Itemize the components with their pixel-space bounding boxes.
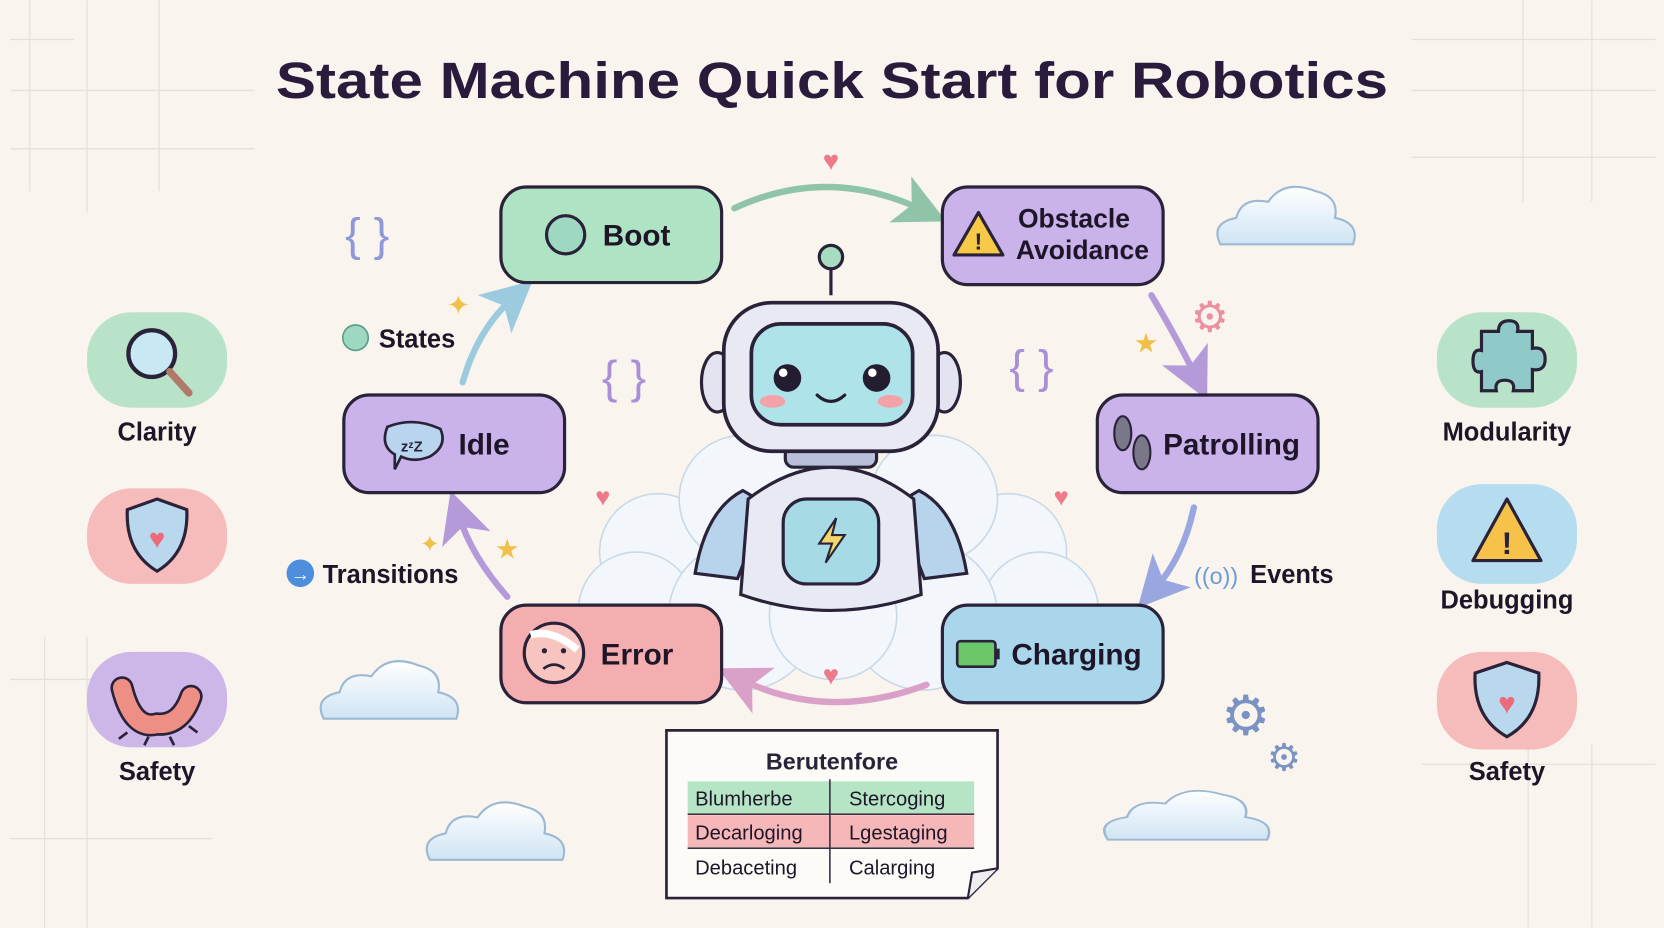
robot	[695, 245, 967, 610]
legend: Events: ((o))	[1194, 563, 1238, 589]
side: Safety (right)	[1437, 652, 1577, 786]
legend: States	[343, 325, 455, 353]
decorations: hearts, stars, braces, gears: ♥	[1054, 483, 1069, 511]
decorations: hearts, stars, braces, gears: ✦	[420, 531, 440, 557]
state: Obstacle Avoidance	[942, 187, 1163, 285]
side: shield: ♥	[149, 523, 165, 554]
legend: States: States	[379, 325, 455, 353]
table note: Lgestaging	[849, 823, 948, 845]
side: Clarity: Clarity	[117, 419, 198, 447]
side: Safety (right): Safety	[1469, 758, 1546, 786]
decorations: hearts, stars, braces, gears: { }	[1009, 340, 1054, 392]
table note: Stercoging	[849, 789, 945, 811]
side: Clarity	[87, 312, 227, 447]
title: State Machine Quick Start for Robotics	[276, 52, 1388, 109]
side: Safety (left)	[87, 652, 227, 786]
decorations: hearts, stars, braces, gears: ✦	[447, 289, 470, 320]
table note: Blumherbe	[695, 789, 793, 811]
side: Debugging: !	[1502, 525, 1512, 561]
arrows between states	[458, 187, 1196, 702]
state: Error	[501, 605, 722, 703]
side: Safety (left): Safety	[119, 758, 196, 786]
state: Obstacle Avoidance: !	[975, 229, 982, 255]
decorations: hearts, stars, braces, gears: ♥	[823, 145, 839, 176]
side: Modularity	[1437, 312, 1577, 447]
side: Modularity: Modularity	[1443, 419, 1572, 447]
table note: Decarloging	[695, 823, 803, 845]
state: Idle: Idle	[458, 428, 510, 461]
decorations: hearts, stars, braces, gears: ★	[495, 533, 520, 564]
state: Boot: Boot	[603, 219, 671, 252]
table note: Debaceting	[695, 858, 797, 880]
legend: Transitions: Transitions	[323, 561, 458, 589]
state: Error: Error	[601, 639, 674, 672]
decorations: hearts, stars, braces, gears: ★	[1134, 328, 1158, 359]
state: Boot	[501, 187, 722, 283]
state: Patrolling	[1097, 395, 1318, 493]
table note: Berutenfore	[766, 749, 898, 775]
decorations: hearts, stars, braces, gears: ⚙	[1191, 293, 1229, 340]
side: Safety (right): ♥	[1498, 687, 1516, 720]
legend: Events	[1194, 561, 1334, 589]
state: Patrolling: Patrolling	[1163, 428, 1300, 461]
state: Charging	[942, 605, 1163, 703]
legend: Transitions: →	[291, 565, 310, 586]
side: shield	[87, 488, 227, 584]
cloud: top right	[1217, 187, 1355, 244]
state: Charging: Charging	[1011, 639, 1142, 672]
table note: Calarging	[849, 858, 935, 880]
decorations: hearts, stars, braces, gears: ♥	[595, 483, 610, 511]
decorations: hearts, stars, braces, gears: { }	[602, 351, 646, 403]
decorations: hearts, stars, braces, gears	[345, 145, 1301, 780]
state: Idle: zᶻZ	[401, 439, 423, 455]
side: Debugging	[1437, 484, 1577, 614]
state: Idle	[344, 395, 565, 493]
state: Obstacle Avoidance: Obstacle	[1018, 203, 1130, 233]
table note	[666, 730, 998, 898]
side: Debugging: Debugging	[1440, 586, 1573, 614]
decorations: hearts, stars, braces, gears: ♥	[823, 660, 839, 691]
legend: Events: Events	[1250, 561, 1334, 589]
state: Obstacle Avoidance: Avoidance	[1016, 235, 1149, 265]
decorations: hearts, stars, braces, gears: ⚙	[1221, 685, 1271, 747]
cloud: bottom right	[1104, 791, 1269, 840]
cloud: bottom left	[427, 802, 564, 860]
big cloud behind robot	[578, 435, 1098, 690]
decorations: hearts, stars, braces, gears: ⚙	[1267, 737, 1301, 780]
cloud: left	[321, 661, 458, 719]
decorations: hearts, stars, braces, gears: { }	[345, 209, 389, 261]
